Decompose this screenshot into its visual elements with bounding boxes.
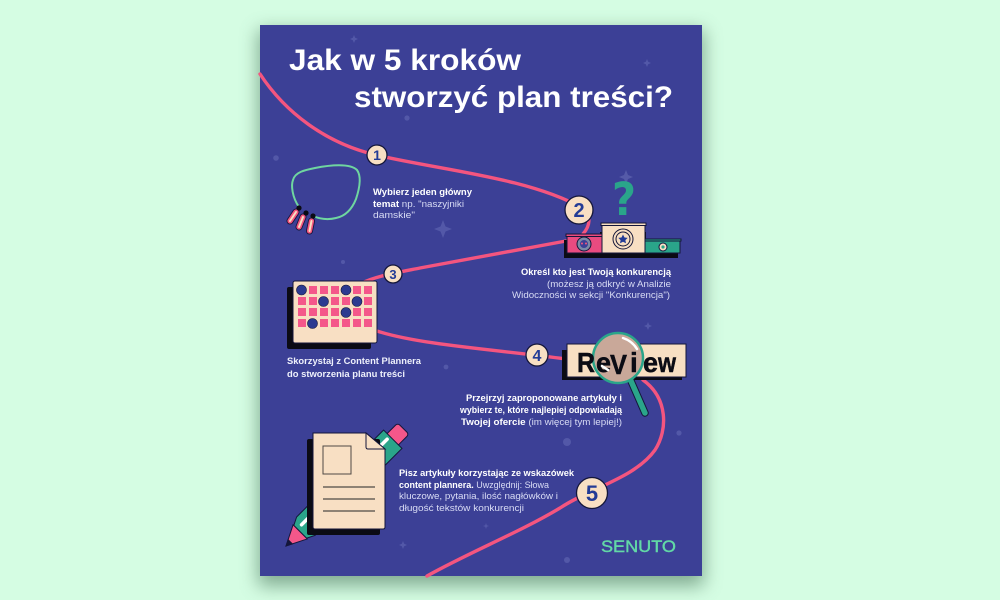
icon: review label with magnifier: i: [630, 347, 638, 378]
step 2 badge: 2: [573, 200, 585, 222]
text: step 1: damskie": [373, 209, 415, 220]
icon: review label with magnifier: w: [657, 347, 676, 378]
text: step 1: Wybierz jeden główny: [373, 186, 473, 197]
text: step 4: Twojej ofercie (im więcej tym lepiej!): [461, 416, 622, 427]
text: step 5: content plannera. Uwzględnij: Słowa: [399, 479, 550, 490]
text: step 3: do stworzenia planu treści: [287, 368, 405, 379]
step 4 badge: [526, 344, 548, 366]
title: stworzyć plan treści?: [354, 81, 673, 114]
text: step 5: [399, 467, 575, 513]
icon: review label with magnifier: [562, 333, 686, 413]
step 2 badge: [565, 196, 593, 224]
icon: review label with magnifier: V: [610, 349, 627, 380]
text: step 4: Przejrzyj zaproponowane artykuły i: [466, 392, 622, 403]
step 1 badge: 1: [373, 147, 381, 163]
icon: star sparkle above question mark: [619, 170, 633, 184]
step 3 badge: 3: [389, 267, 397, 282]
icon: pen: [277, 419, 413, 555]
text: step 3: Skorzystaj z Content Plannera: [287, 355, 422, 366]
text: step 3: [287, 355, 422, 379]
text: step 4: wybierz te, które najlepiej odpowiadają: [459, 404, 623, 415]
icon: review label with magnifier: e: [643, 347, 658, 378]
text: step 5: długość tekstów konkurencji: [399, 502, 524, 513]
title: [289, 44, 673, 114]
panel: poster: [260, 25, 702, 576]
pink route line: [260, 74, 664, 576]
icon: calendar: [287, 281, 377, 349]
text: step 4: [459, 392, 623, 427]
icon: review label with magnifier: e: [596, 347, 611, 378]
icon: podium: [564, 223, 681, 258]
text: step 2: Widoczności w sekcji "Konkurencja"): [512, 289, 670, 300]
text: step 5: Pisz artykuły korzystając ze wskazówek: [399, 467, 575, 478]
text: step 2: [512, 266, 672, 300]
text: step 1: temat np. "naszyjniki: [373, 198, 464, 209]
step 5 badge: 5: [586, 481, 598, 506]
text: step 2: Określ kto jest Twoją konkurencją: [521, 266, 672, 277]
step 3 badge: [384, 265, 402, 283]
icon: review label with magnifier: R: [577, 347, 595, 378]
icon: necklace: [290, 165, 360, 231]
card shadow: [258, 30, 704, 586]
text: step 5: kluczowe, pytania, ilość nagłówków i: [399, 490, 558, 501]
logo: Senuto: SENUTO: [601, 538, 676, 556]
icon: question mark: ?: [612, 173, 636, 226]
text: step 1: [373, 186, 473, 220]
icon: document: [307, 433, 385, 535]
step 1 badge: [367, 145, 387, 165]
title: Jak w 5 kroków: [289, 44, 522, 77]
step 4 badge: 4: [533, 348, 542, 365]
text: step 2: (możesz ją odkryć w Analizie: [547, 278, 671, 289]
step 5 badge: [576, 478, 608, 508]
